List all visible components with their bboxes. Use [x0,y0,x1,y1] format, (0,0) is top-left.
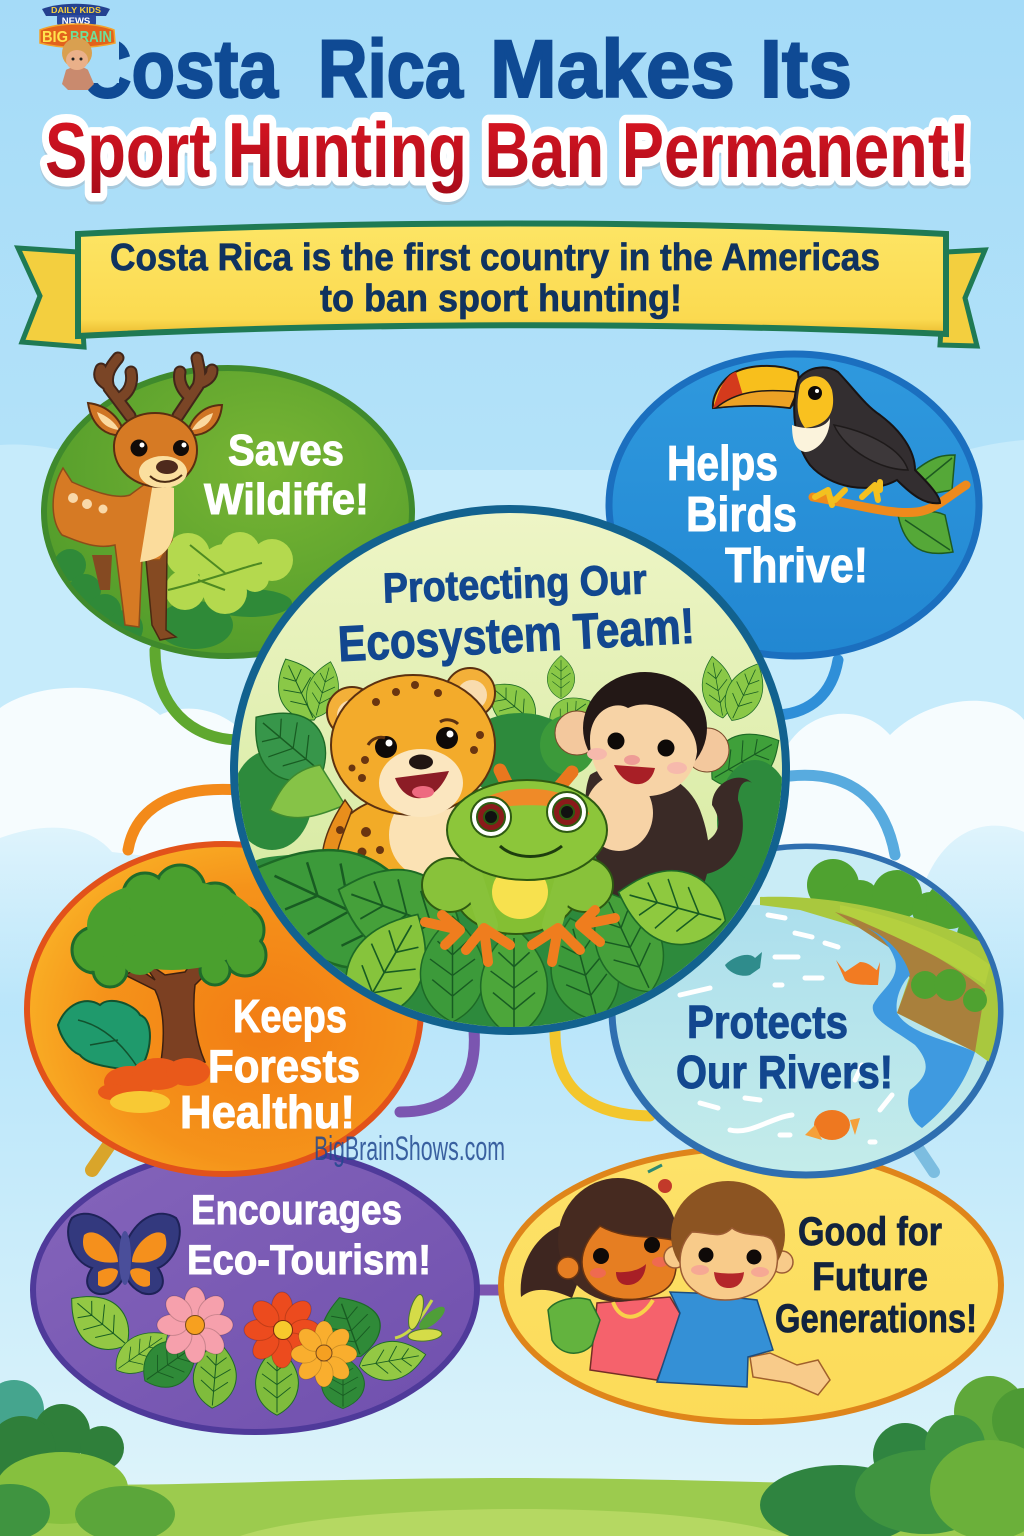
connector loops between bubbles [92,650,934,1290]
watermark: BigBrainShows.com [314,1130,505,1168]
label: protects our rivers: Protects [687,996,848,1048]
background: grassy hill and bushes [0,1376,1024,1536]
panel: helps birds thrive [609,354,979,656]
icon: butterfly [68,1214,180,1294]
label: helps birds thrive [667,437,868,593]
background: clouds [0,440,1024,1015]
central heading: Ecosystem Team! [337,598,696,672]
central heading: Protecting Our [382,555,648,612]
illustration: leaf bed [258,848,726,1027]
title line 1: Its [760,24,852,115]
label: encourages eco-tourism [187,1186,431,1283]
label: good for future generations [775,1210,977,1341]
label: protects our rivers: Our Rivers! [676,1046,893,1098]
label: helps birds thrive: Helps [667,437,778,491]
icon: flowers and leaves [57,1280,448,1415]
panel: saves wildlife [44,358,412,656]
logo: Daily Kids News Big Brain: BIG [42,29,68,46]
logo: Daily Kids News Big Brain: BRAIN [70,29,112,46]
banner ribbon [18,224,985,347]
central heading [337,555,696,672]
title line 1: Rica [318,24,464,115]
label: keeps forests healthy: Healthu! [180,1086,355,1138]
label: encourages eco-tourism: Encourages [191,1186,402,1233]
title line 1 [80,24,852,115]
panel: encourages eco-tourism [33,1148,477,1432]
banner text: to ban sport hunting! [320,278,682,320]
panel: good for future generations [501,1148,1001,1422]
label: helps birds thrive: Thrive! [725,539,868,593]
banner text: Costa Rica is the first country in the Americas [110,237,880,279]
label: good for future generations: Good for [798,1210,942,1254]
logo: Daily Kids News Big Brain: NEWS [62,16,90,27]
label: keeps forests healthy: Keeps [233,990,347,1042]
label: saves wildlife: Saves [228,426,344,475]
illustration: jaguar [322,667,496,874]
title line 1: Costa [80,24,279,115]
label: helps birds thrive: Birds [686,488,797,542]
icon: deer [53,358,222,640]
label: saves wildlife: Wildiffe! [204,475,369,524]
logo: Daily Kids News Big Brain: DAILY KIDS [51,5,101,15]
icon: branch and leaves [813,455,966,553]
label: good for future generations: Future [812,1255,928,1299]
label: keeps forests healthy [180,990,360,1138]
icon: tree [58,865,266,1113]
banner text [110,237,880,320]
logo: Daily Kids News Big Brain [40,4,119,90]
icon: oak leaf foliage [54,532,293,649]
panel: protects our rivers [610,845,1010,1175]
illustration: monkey [555,672,752,905]
illustration: river landscape [678,849,998,1144]
label: saves wildlife [204,426,369,524]
label: encourages eco-tourism: Eco-Tourism! [187,1236,431,1283]
label: good for future generations: Generations! [775,1297,977,1341]
icon: toucan [713,366,940,505]
title line 1: Makes [490,24,735,115]
illustration: two children [521,1165,830,1395]
panel: keeps forests healthy [27,844,421,1174]
label: protects our rivers [676,996,893,1098]
label: keeps forests healthy: Forests [208,1040,360,1092]
illustration: back foliage [230,650,800,1040]
panel: central ecosystem team [230,509,800,1040]
illustration: frog [422,770,615,962]
